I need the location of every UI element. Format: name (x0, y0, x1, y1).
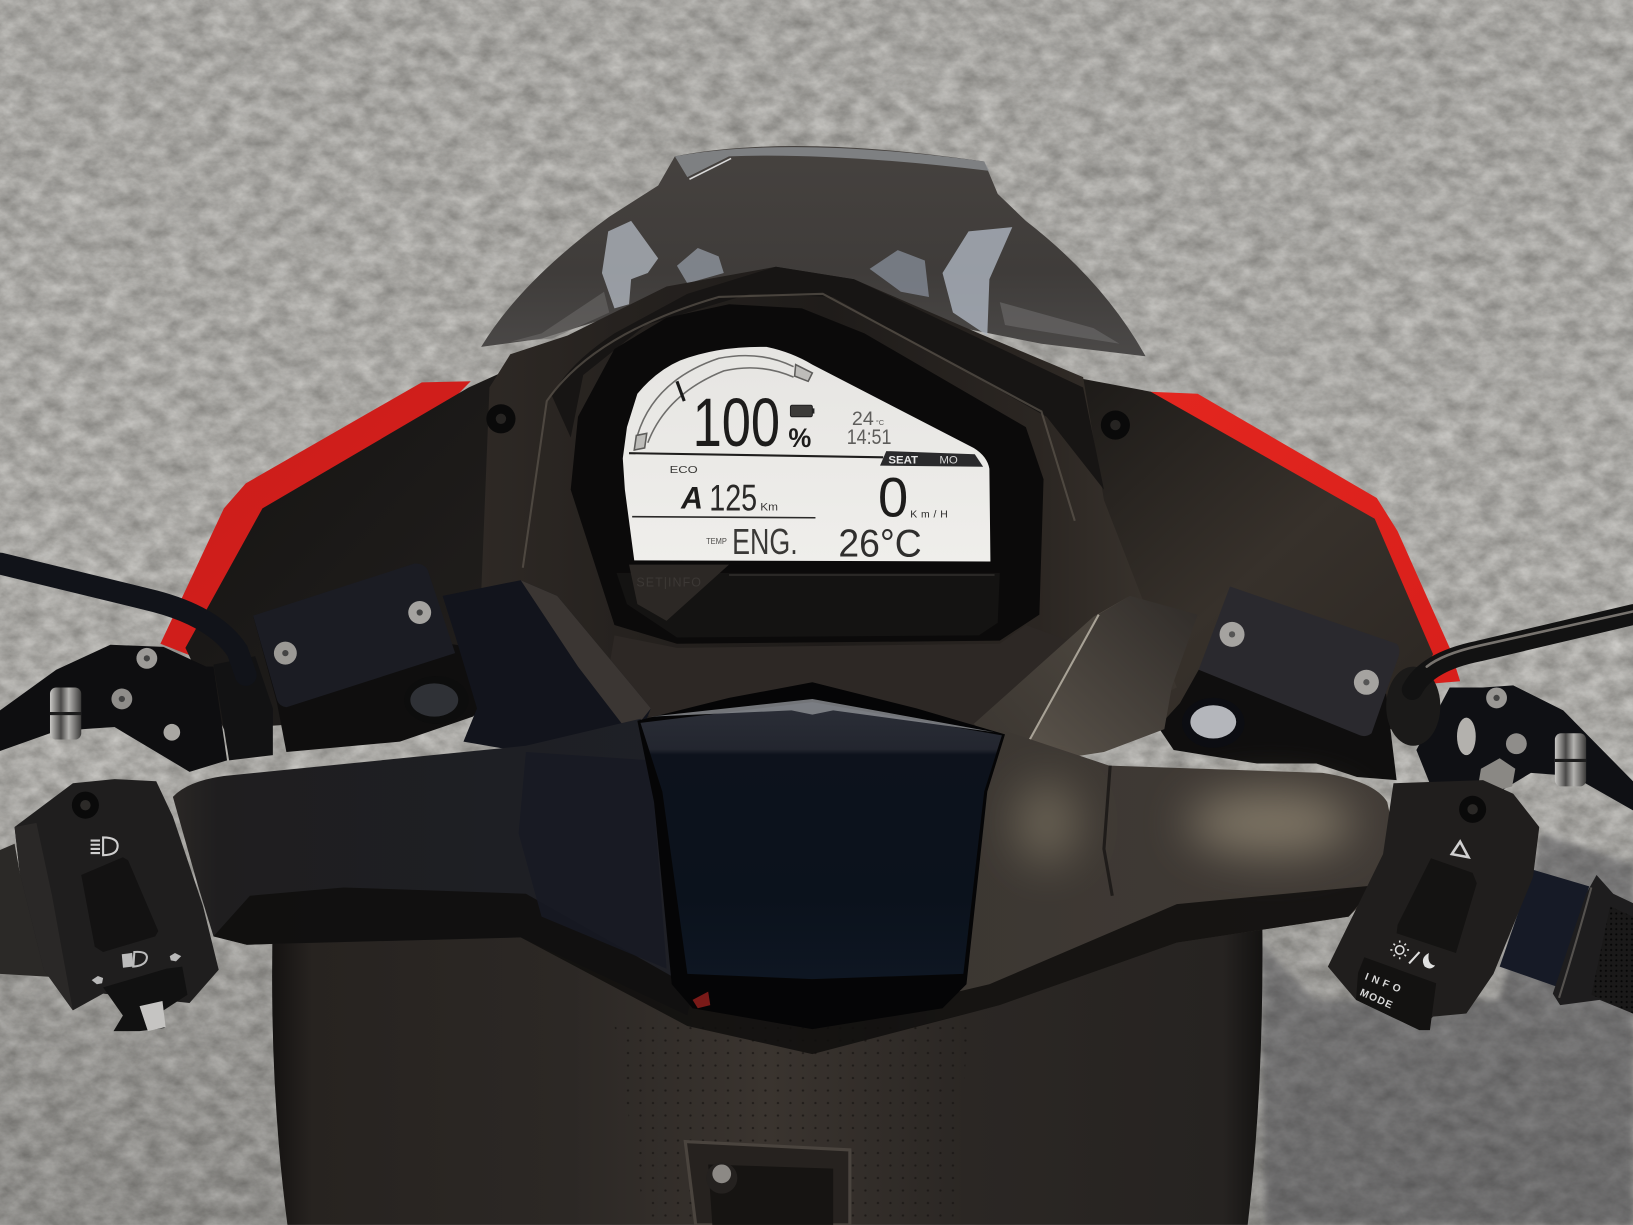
leg shield (272, 917, 1262, 1225)
info mode button (1356, 957, 1436, 1030)
indicator slider (103, 967, 187, 1031)
LCD display (623, 347, 990, 565)
sun icon (1390, 941, 1409, 959)
lower divider (632, 517, 815, 518)
red side panel left (160, 381, 471, 667)
ambient temperature unit: °C (876, 418, 884, 427)
left grip (0, 844, 53, 977)
turn arrows (92, 953, 181, 984)
brown panel below display (609, 625, 1083, 740)
center glossy panel (637, 682, 1005, 1029)
dark side fairing right (1041, 375, 1433, 729)
handlebar crossbar (173, 719, 1401, 1054)
ignition slot (685, 1142, 850, 1225)
right grip (1500, 870, 1589, 986)
brake lever left (0, 645, 227, 772)
hump left (443, 580, 651, 755)
display bezel (571, 304, 1044, 644)
nacelle arch (552, 267, 1104, 490)
rocker switch (81, 857, 158, 952)
dark side fairing left (185, 354, 542, 729)
instrument nacelle (479, 267, 1177, 750)
upper divider (629, 453, 883, 457)
slash (1409, 952, 1420, 963)
riding mode: ECO (670, 465, 698, 476)
moon icon (1423, 953, 1435, 968)
bolt right (1101, 410, 1130, 440)
hump right (974, 596, 1198, 766)
brake reservoir left (253, 564, 483, 752)
range arc gauge (634, 356, 812, 450)
display lower panel with SET INFO button (617, 565, 1000, 637)
engine label: ENG. (732, 521, 798, 562)
percent sign: % (788, 422, 811, 453)
brake reservoir right (1158, 586, 1399, 780)
battery percentage: 100 (693, 384, 780, 461)
range value: 125 (709, 476, 757, 518)
ambient temperature: 24 (852, 408, 874, 430)
switch housing (1328, 780, 1539, 1030)
range unit: Km (760, 501, 778, 513)
headlight icon (91, 837, 118, 855)
engine temperature: 26°C (838, 522, 922, 565)
temp label: TEMP (706, 536, 727, 546)
left switch block (0, 779, 219, 1031)
LCD screen (623, 347, 990, 561)
range icon: A (680, 480, 703, 515)
brand badge (880, 451, 983, 467)
display lower panel with SET INFO button: SET|INFO (636, 575, 702, 589)
brand badge: MO (939, 455, 958, 467)
right switch block (1328, 780, 1633, 1030)
mirror stalk left (0, 564, 246, 675)
rocker switch (1397, 858, 1477, 953)
mirror post left (213, 656, 273, 760)
clock: 14:51 (847, 426, 891, 449)
mirror stalk right (1412, 611, 1633, 690)
info mode button: INFO (1363, 972, 1406, 997)
mirror socket right (1386, 667, 1440, 746)
battery icon (790, 405, 814, 417)
brake lever right (1416, 685, 1633, 810)
switch housing (15, 779, 219, 1010)
speed unit: Km/H (910, 510, 948, 521)
info mode button: MODE (1358, 987, 1395, 1012)
hazard icon (1452, 842, 1468, 857)
red side panel right (1150, 392, 1460, 687)
speed value: 0 (878, 467, 908, 529)
bolt left (486, 404, 516, 433)
brand badge: SEAT (888, 455, 918, 467)
dip beam icon (123, 952, 147, 967)
windshield (481, 146, 1146, 356)
bezel tan edge (523, 294, 1075, 568)
